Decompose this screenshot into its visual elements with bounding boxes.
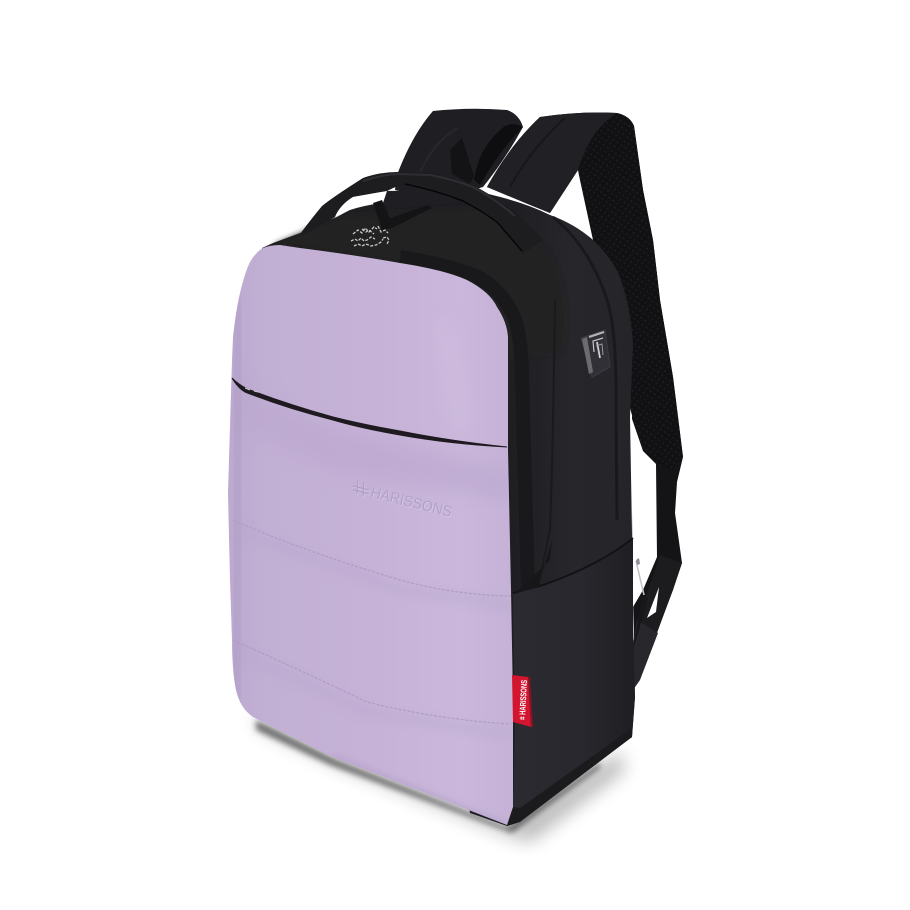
lower pocket [513, 538, 635, 824]
main body [262, 190, 635, 826]
gap: near right strap top [551, 171, 593, 240]
panel shading [410, 462, 509, 490]
zipper cord [373, 200, 432, 230]
USB port [581, 330, 610, 377]
side gusset seam [553, 217, 617, 520]
gap: webbing [647, 587, 659, 618]
quilted seam: lower [233, 640, 511, 724]
embossed brand logo: HARISSONS [369, 484, 454, 521]
pocket zipper [232, 378, 507, 447]
red brand tag: ⌗ HARISSONS [517, 679, 529, 721]
strap adjuster tab [632, 620, 658, 690]
quilted seam: upper [233, 520, 511, 596]
zipper pulls [351, 226, 389, 246]
shoulder strap: left, behind [395, 109, 523, 200]
bottom trim [507, 728, 632, 826]
strap webbing loop [450, 138, 474, 184]
top handle [300, 172, 543, 254]
top gusset [273, 207, 565, 360]
zipper binding around panel [400, 257, 528, 588]
shoulder strap: right, padded with mesh back [487, 112, 683, 690]
lavender front panel [228, 245, 513, 825]
embossed brand logo: HARISSONS [370, 485, 454, 522]
backpack product illustration [228, 108, 683, 850]
floor shadow [255, 716, 625, 842]
red brand tag [512, 675, 533, 727]
gap: under handle [335, 191, 387, 217]
gap: between strap and body [631, 416, 657, 607]
side zipper pull [633, 558, 648, 650]
